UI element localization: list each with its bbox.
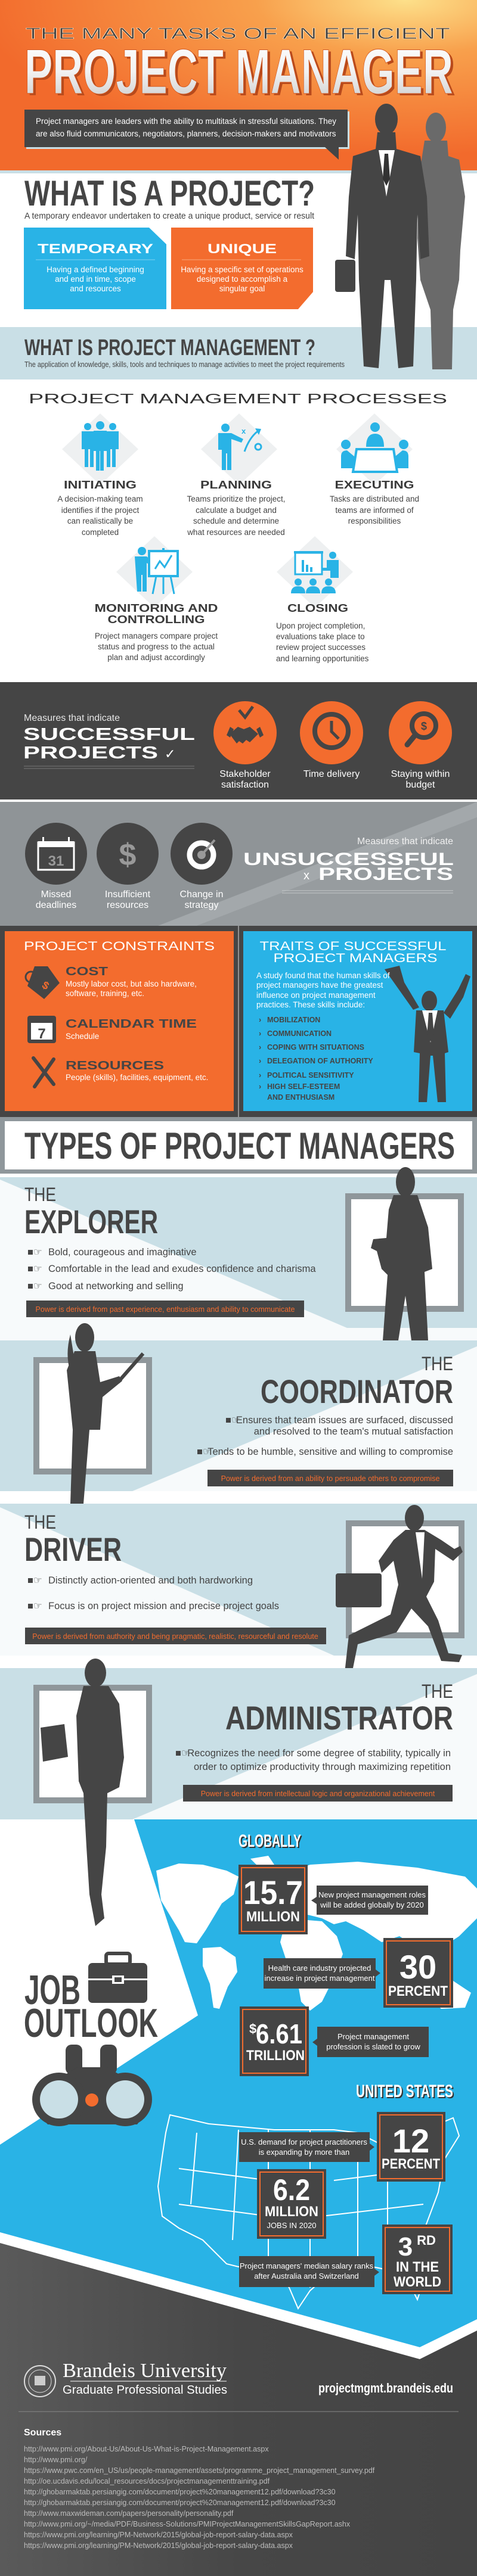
panel: project constraints: CALENDAR TIME [66,1018,197,1031]
panel: unsuccessful projects: UNSUCCESSFUL [243,850,454,869]
sources: http://www.maxwideman.com/papers/personality/personality.pdf [24,2509,234,2518]
type: explorer: Good at networking and selling [48,1281,184,1292]
type: administrator: THE [422,1681,453,1702]
process: monitoring and controlling [94,536,218,662]
callout: US demand: U.S. demand for project practitioners [241,2138,367,2146]
process: closing: CLOSING [287,602,348,614]
icon: dollar: resources [107,900,148,910]
silhouette: businessman header [335,104,429,368]
icon: price tag: $ [40,979,51,992]
icon: price tag [26,966,60,999]
header background [0,0,477,173]
icon: target: strategy [185,900,218,910]
type: driver: ■☞ [27,1575,42,1586]
type: driver: Distinctly action-oriented and both hardworking [48,1575,253,1586]
process: initiating: A decision-making team [57,494,143,503]
icon: university seal [24,2366,55,2397]
icon: tools [33,1058,54,1087]
world map [156,1856,477,2011]
type: coordinator: ■☞ [225,1415,240,1426]
process: closing: and learning opportunities [276,654,369,663]
sources: http://www.pmi.org/~/media/PDF/Business-Solutions/PMIProjectManagementSkillsGapReport.ashx [24,2520,351,2528]
callout: profession grow [312,2027,429,2057]
card: temporary: Having a defined beginning [47,265,144,274]
panel: project constraints: software, training, etc. [66,989,144,998]
panel: traits of successful project managers: COMMUNICATION [267,1029,332,1038]
type: explorer [0,1167,477,1340]
panel: unsuccessful projects [0,802,477,926]
stat: 6.2 million jobs: JOBS IN 2020 [267,2221,317,2230]
sources: http://www.pmi.org/ [24,2456,88,2464]
process: monitoring and controlling: plan and adjust accordingly [107,653,205,662]
icon: dollar [97,823,159,910]
callout: health care: Health care industry projected [268,1964,371,1973]
callout: new roles: New project management roles [318,1890,426,1899]
job outlook heading with icons: OUTLOOK [24,2001,158,2046]
process: planning: calculate a budget and [196,506,277,515]
card: unique: designed to accomplish a [197,275,288,284]
stat: 6.2 million jobs: MILLION [265,2204,318,2220]
icon: budget magnifier: $ [421,720,427,732]
panel: project constraints: RESOURCES [66,1059,164,1072]
panel: traits of successful project managers: › [259,1082,261,1091]
panel: traits of successful project managers: MOBILIZATION [267,1016,320,1024]
icon: briefcase [88,1953,147,2003]
panel: successful projects: Measures that indicate [24,713,120,723]
card: temporary [24,228,166,309]
stat: 3rd in the world: WORLD [394,2274,441,2290]
panel: traits of successful project managers: TRAITS OF SUCCESSFUL [260,939,446,953]
band: what is project management: WHAT IS PROJECT MANAGEMENT ? [24,335,315,360]
silhouette: celebrating man [385,966,470,1102]
type: explorer: THE [24,1184,56,1205]
header title: THE MANY TASKS OF AN EFFICIENT [26,24,450,42]
icon: calendar 31: 31 [48,853,64,869]
process: initiating: INITIATING [64,479,137,491]
type: coordinator: and resolved to the team's mutual satisfaction [254,1426,453,1437]
US map outline [158,2115,459,2309]
silhouette: walking man [371,1167,432,1340]
process: planning: Teams prioritize the project, [187,494,286,503]
panel: traits of successful project managers: POLITICAL SENSITIVITY [267,1071,354,1079]
type: administrator: Recognizes the need for some degree of stability, typically in [187,1748,451,1759]
callout: salary rank: after Australia and Switzerland [254,2272,359,2281]
process: initiating: identifies if the project [61,506,140,515]
stat: 30 percent [383,1938,453,2008]
icon: presenter with chart [135,547,178,594]
panel: traits of successful project managers: › [259,1071,261,1079]
icon: calendar 7 [27,1016,56,1043]
icon: dollar: Insufficient [105,889,151,900]
panel: traits of successful project managers: AND ENTHUSIASM [267,1093,334,1102]
panel: project constraints: COST [66,965,108,978]
type: administrator: order to optimize productivity through maximizing repetition [194,1762,451,1772]
panel: traits of successful project managers: A study found that the human skills of [256,971,390,980]
type: coordinator [0,1323,477,1504]
process: executing: EXECUTING [335,479,414,491]
heading: globally: GLOBALLY [238,1831,301,1851]
stat: 15.7 million: MILLION [246,1909,300,1925]
type: driver: Power is derived from authority and being pragmatic, realistic, resourceful and resolute [32,1632,318,1641]
panel: unsuccessful projects: Measures that indicate [357,836,453,847]
callout: new roles [311,1886,428,1915]
band: what is project management [0,327,477,379]
stat: 6.61 trillion: $ [249,2021,256,2036]
card: temporary: TEMPORARY [38,241,153,256]
sources: http://ghobarmaktab.persiangig.com/document/project%20management12.pdf/download?3c30 [24,2488,336,2496]
footer branding [24,2360,453,2397]
panel: traits of successful project managers: › [259,1029,261,1038]
type: explorer: EXPLORER [24,1203,158,1240]
callout: US demand: is expanding by more than [259,2148,349,2157]
type: coordinator: Ensures that team issues are surfaced, discussed [236,1415,453,1426]
stat: 30 percent: 30 [399,1948,436,1986]
job outlook background [0,1819,477,2347]
heading: globally: GLOBALLY [240,1833,302,1852]
type: explorer: Bold, courageous and imaginative [48,1247,197,1258]
stat: 12 percent: 12 [392,2122,429,2160]
icon: calendar 7: 7 [38,1026,46,1042]
stat: 6.2 million jobs [257,2169,326,2239]
type: driver: Focus is on project mission and precise project goals [48,1601,279,1611]
intro speech box [24,110,349,160]
process: executing: teams are informed of [335,506,414,515]
panel: traits of successful project managers: project managers have the greatest [256,981,383,990]
types of project managers title [0,1117,477,1174]
process: monitoring and controlling: Project managers compare project [95,631,218,640]
type: driver: DRIVER [24,1530,122,1568]
card: temporary: and resources [70,284,121,293]
icon: budget magnifier: Staying within [391,769,450,779]
processes title: PROJECT MANAGEMENT PROCESSES [29,391,447,406]
what is a project heading: A temporary endeavor undertaken to create a unique product, service or result [24,211,315,221]
job outlook heading with icons: JOB [24,1967,80,2013]
icon: budget magnifier [389,701,452,790]
panel: successful projects: ✓ [165,746,175,761]
icon: handshake: Stakeholder [219,769,271,779]
stat: 30 percent: PERCENT [388,1983,448,1999]
type: administrator: Power is derived from intellectual logic and organizational achievement [201,1790,435,1798]
card: unique: singular goal [219,284,265,293]
callout: US demand [239,2132,374,2162]
process: closing: Upon project completion, [276,621,365,630]
sources: http://www.pmi.org/About-Us/About-Us-What-is-Project-Management.aspx [24,2445,269,2453]
panel: traits of successful project managers: DELEGATION OF AUTHORITY [267,1057,373,1065]
stat: 6.2 million jobs: 6.2 [273,2173,310,2207]
sources: https://www.pmi.org/learning/PM-Network/2015/global-job-report-salary-data.aspx [24,2541,293,2550]
callout: new roles: will be added globally by 2020 [320,1900,424,1909]
type: explorer: ■☞ [27,1247,42,1258]
sources: Sources [24,2428,61,2438]
icon: target [171,823,233,910]
panel: project constraints [5,931,234,1111]
type: administrator [0,1659,477,1926]
icon: handshake: satisfaction [221,780,269,790]
callout: salary rank: Project managers' median salary ranks [240,2261,374,2270]
type: driver: ■☞ [27,1601,42,1611]
type: explorer: ■☞ [27,1281,42,1292]
panel: traits of successful project managers: › [259,1057,261,1065]
sources: https://www.pmi.org/learning/PM-Network/2015/global-job-report-salary-data.aspx [24,2531,293,2539]
stat: 3rd in the world: IN THE [396,2259,439,2275]
stat: 3rd in the world: RD [417,2233,436,2248]
panel: traits of successful project managers: practices. These skills include: [256,1000,365,1009]
callout: health care [264,1958,380,1989]
panel: successful projects: PROJECTS [23,743,158,763]
icon: calendar 31: deadlines [36,900,76,910]
sources: http://ghobarmaktab.persiangig.com/document/project%20management12.pdf/download?3c30 [24,2499,336,2507]
icon: handshake [213,701,277,790]
panel: successful projects: SUCCESSFUL [23,725,195,744]
stat: 15.7 million: 15.7 [243,1874,303,1911]
panel: traits of successful project managers: influence on project management [256,991,376,1000]
intro speech box: are also fluid communicators, negotiators, planners, decision-makers and motivators [36,129,336,138]
type: coordinator: ■☞ [197,1446,212,1457]
process: planning: PLANNING [200,479,272,491]
silhouette: woman with papers [41,1659,124,1926]
stat: 6.61 trillion [240,2006,309,2076]
stat: 6.61 trillion: TRILLION [246,2048,305,2064]
panel: traits of successful project managers: › [259,1043,261,1051]
type: explorer: Comfortable in the lead and exudes confidence and charisma [48,1264,316,1274]
footer branding: Brandeis University [63,2360,227,2382]
process: closing [276,536,369,663]
panel: project constraints: Schedule [66,1032,99,1041]
icon: target: Change in [180,889,223,900]
stat: 12 percent: PERCENT [382,2156,440,2172]
callout: salary rank [239,2256,379,2287]
card: unique: Having a specific set of operations [181,265,303,274]
icon: clock [300,701,363,779]
silhouette: businesswoman header [417,113,465,369]
what is a project heading [24,173,315,221]
type: coordinator: Tends to be humble, sensitive and willing to compromise [207,1446,453,1457]
sources [24,2428,375,2550]
heading: globally [238,1831,302,1852]
process: executing: responsibilities [348,517,401,525]
stat: 6.61 trillion: 6.61 [256,2018,302,2049]
callout: health care: increase in project management [265,1974,375,1983]
card: unique: UNIQUE [207,241,277,256]
type: administrator: ■☞ [175,1748,190,1759]
sources: https://www.pwc.com/en_US/us/people-management/assets/programme_project_management_survey.pdf [24,2466,375,2475]
icon: binoculars [32,2045,152,2126]
band: what is project management: The application of knowledge, skills, tools and techniques to manage activities to meet the project requirements [24,360,345,369]
type: driver: THE [24,1511,56,1533]
stat: 3rd in the world: 3 [398,2232,413,2261]
panel: traits of successful project managers: PROJECT MANAGERS [273,951,438,965]
panel: unsuccessful projects: PROJECTS [318,864,453,884]
what is a project heading: WHAT IS A PROJECT? [24,173,315,213]
stat: 12 percent [377,2112,445,2182]
type: explorer: ■☞ [27,1264,42,1274]
card: temporary: and end in time, scope [55,275,136,284]
callout: profession grow: profession is slated to grow [326,2042,420,2051]
sources: http://oe.ucdavis.edu/local_resources/docs/projectmanagementtraining.pdf [24,2477,270,2485]
icon: presentation audience [291,551,339,593]
icon: dollar: $ [119,838,137,872]
icon: calendar 31: Missed [41,889,71,900]
panel: traits of successful project managers: COPING WITH SITUATIONS [267,1043,364,1051]
process: executing: Tasks are distributed and [330,494,419,503]
panel: traits of successful project managers: HIGH SELF-ESTEEM [267,1082,340,1091]
panel: traits of successful project managers: › [259,1016,261,1024]
panel: project constraints: People (skills), facilities, equipment, etc. [66,1073,208,1082]
icon: planner: x [241,427,246,435]
silhouette: woman with tablet [67,1323,143,1504]
icon: budget magnifier: budget [406,780,435,790]
panel: unsuccessful projects: x [303,869,309,882]
stat: 15.7 million [238,1865,308,1934]
job outlook heading with icons [24,1953,158,2126]
card: unique [171,228,313,309]
panel: successful projects [0,682,477,799]
process: planning: what resources are needed [187,528,285,537]
callout: profession grow: Project management [337,2032,409,2041]
process: monitoring and controlling: MONITORING AND [94,602,218,614]
process: initiating: can realistically be [67,517,133,525]
type: coordinator: Power is derived from an ability to persuade others to compromise [221,1474,439,1483]
process: closing: review project successes [276,643,366,652]
panel: project constraints: PROJECT CONSTRAINTS [24,939,215,953]
process: planning [187,413,286,537]
silhouette: running man with briefcase [336,1505,463,1674]
process: executing [330,413,419,525]
process: monitoring and controlling: status and progress to the actual [98,642,215,651]
icon: three people [82,421,119,471]
dark band behind constraints [0,926,477,1117]
process: planning: schedule and determine [193,517,279,525]
icon: clock: Time delivery [303,769,360,779]
icon: planner [218,424,261,470]
process: monitoring and controlling: CONTROLLING [107,614,205,626]
footer branding: Graduate Professional Studies [63,2384,227,2397]
type: explorer: Power is derived from past experience, enthusiasm and ability to communicate [36,1305,295,1314]
panel: traits of successful project managers [243,931,472,1111]
process: initiating: completed [82,528,119,537]
panel: project constraints: Mostly labor cost, but also hardware, [66,979,197,988]
process: closing: evaluations take place to [276,632,365,641]
process: initiating [57,413,143,537]
stat: 3rd in the world [382,2225,453,2294]
icon: calendar 31 [25,823,87,910]
type: driver [0,1504,477,1674]
intro speech box: Project managers are leaders with the ability to multitask in stressful situations. They [36,117,336,126]
type: coordinator: THE [422,1353,453,1374]
icon: meeting table [341,422,408,472]
